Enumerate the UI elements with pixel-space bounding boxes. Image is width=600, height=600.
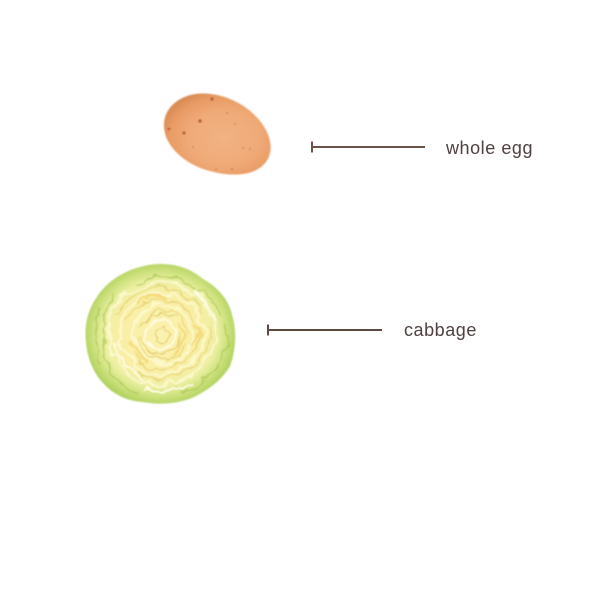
pointer line: whole egg — [311, 142, 425, 152]
pointer line: cabbage — [267, 324, 382, 336]
icon: whole egg — [164, 93, 271, 175]
icon: cabbage — [85, 264, 235, 404]
label: cabbage: cabbage — [404, 320, 477, 340]
label: whole egg: whole egg — [445, 138, 533, 158]
